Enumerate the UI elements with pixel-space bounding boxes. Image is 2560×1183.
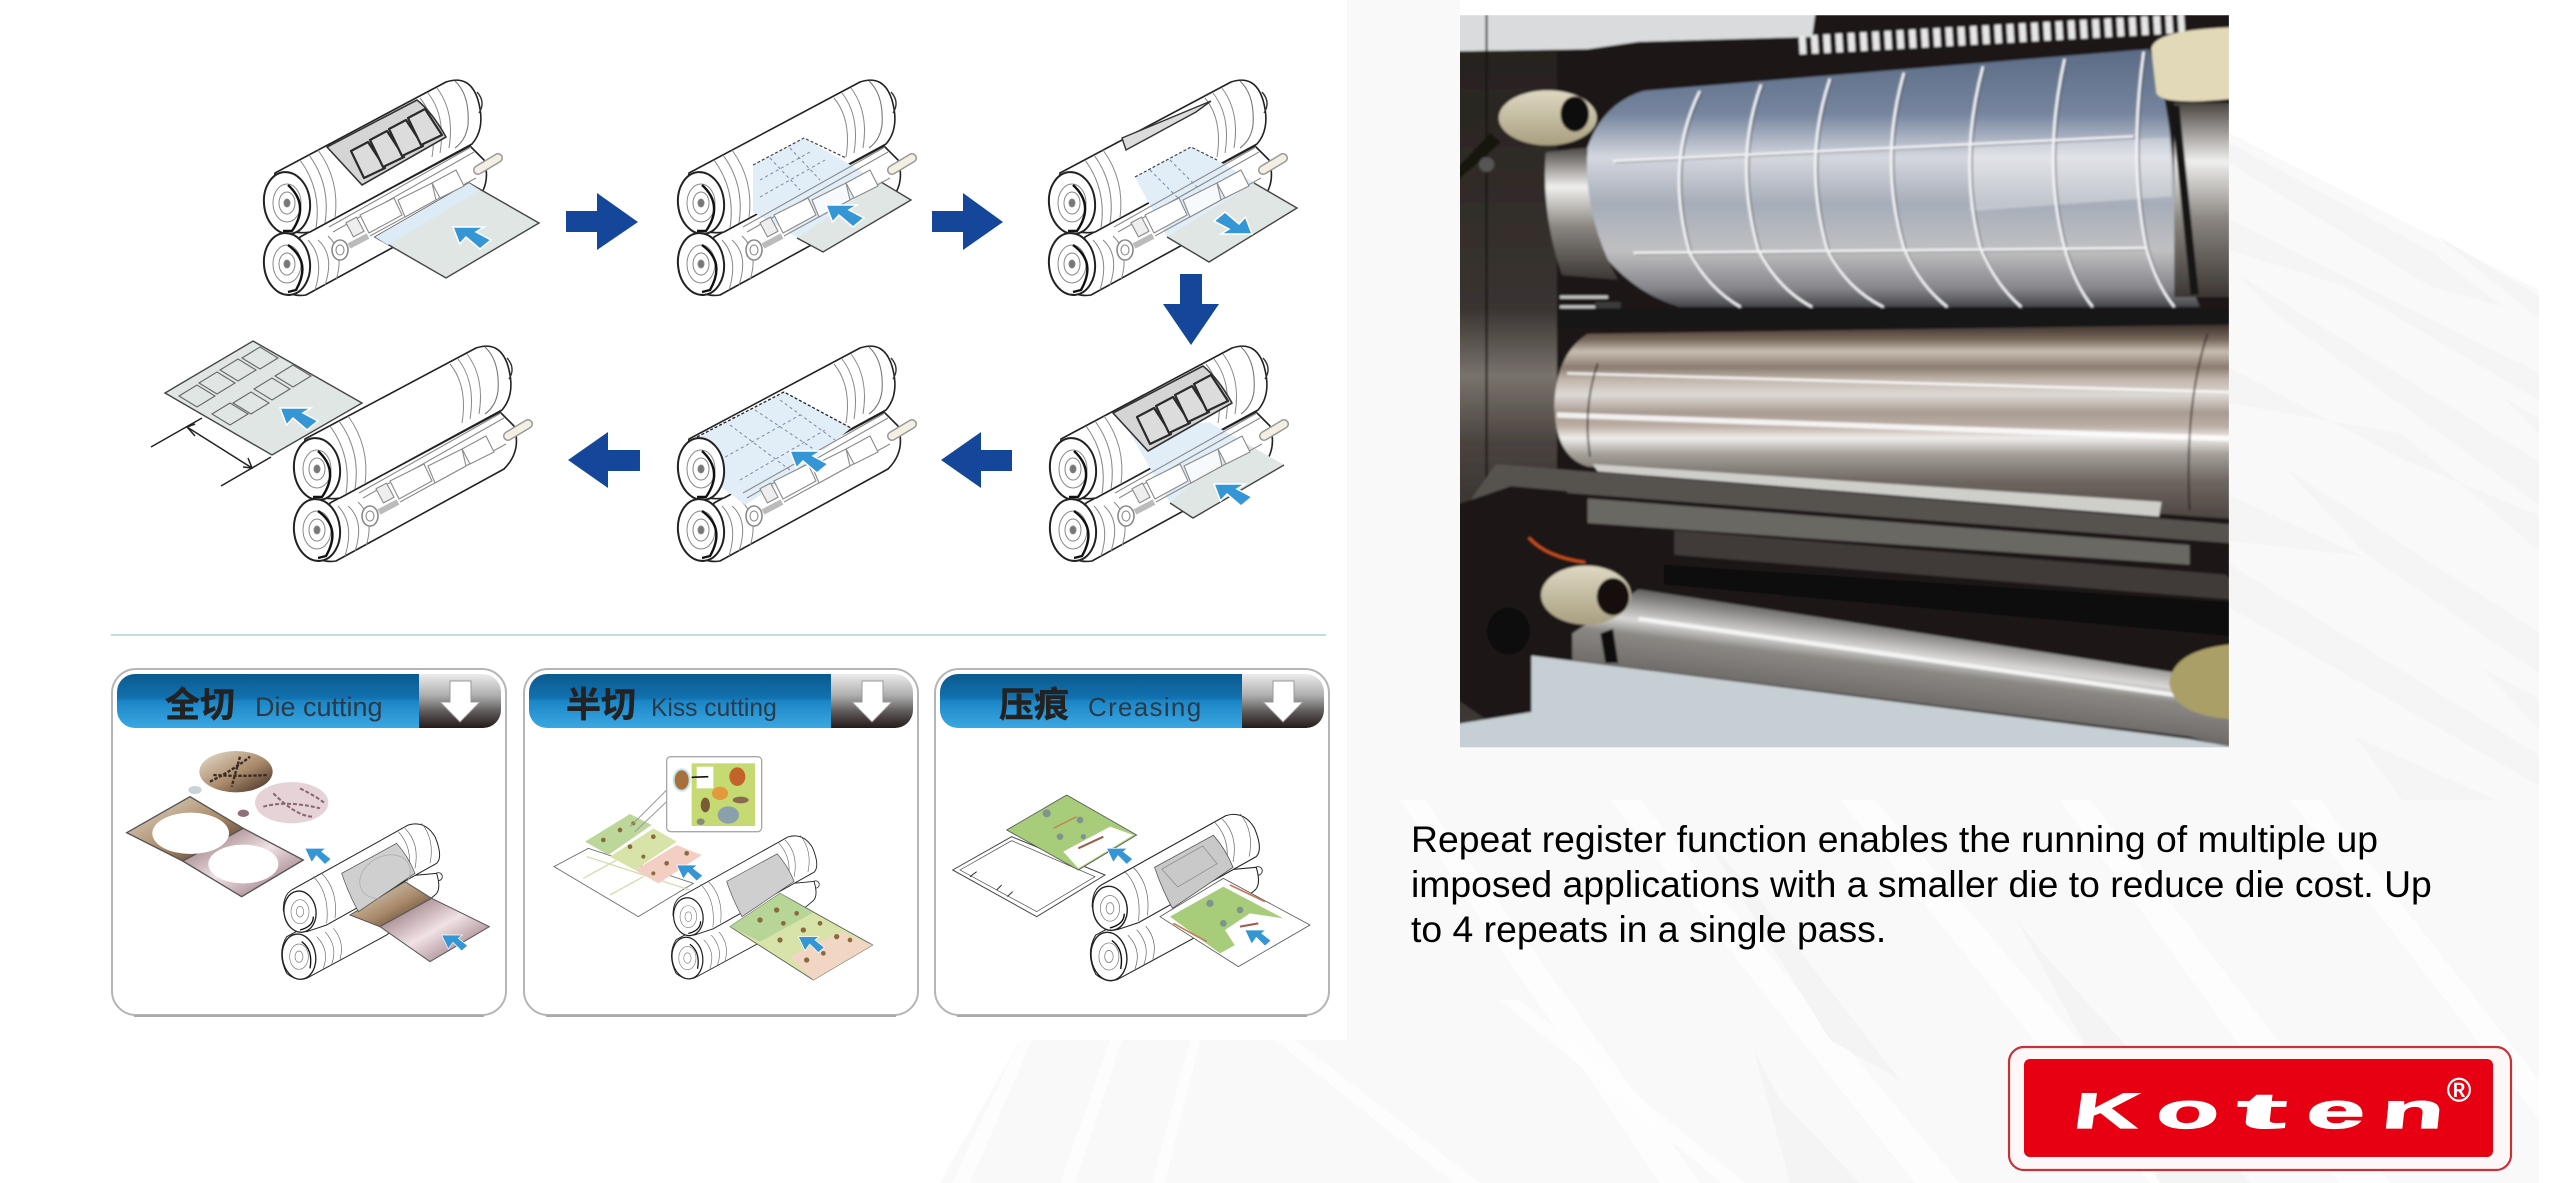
wool wipers: [1499, 90, 1597, 145]
step 5: sheet wrapping cylinder: [675, 346, 912, 563]
step 1: die plate with four windows, sheet feeding: [261, 80, 539, 297]
logo: Koten: t: [2234, 1083, 2290, 1139]
arrow: step 3 to 4: [1163, 274, 1219, 345]
arrow: step 1 to 2: [566, 193, 638, 250]
card: kiss cutting: [524, 669, 918, 1016]
upper right bands: [2229, 143, 2539, 800]
logo: Koten: o: [2154, 1083, 2222, 1139]
vent slots: [1799, 24, 2184, 45]
step 2: sheet under cylinder: [675, 80, 912, 297]
die cutting illustration: [127, 751, 489, 981]
lower roller: [1572, 589, 2256, 756]
kiss cutting illustration: [554, 757, 873, 981]
card heading: creasing: 压痕: [999, 686, 1069, 725]
logo: Koten: e: [2304, 1083, 2368, 1139]
callout: sticker detail: [630, 757, 762, 832]
card heading: creasing: Creasing: [1088, 692, 1202, 722]
step 4: die plate, second sheet feed: [1047, 346, 1284, 563]
card heading: die cutting: 全切: [165, 686, 235, 725]
bottom light floor: [1460, 654, 2229, 748]
hubs: [1545, 147, 1618, 280]
logo: Koten: n: [2379, 1083, 2447, 1139]
logo: Koten: [2009, 1047, 2511, 1170]
card heading: kiss cutting: Kiss cutting: [651, 695, 777, 722]
card heading: creasing: [999, 686, 1202, 725]
step 3: sheet exiting: [1046, 80, 1297, 297]
logo: Koten: ®: [2447, 1071, 2471, 1108]
description text: to 4 repeats in a single pass.: [1411, 908, 1886, 950]
arrow: step 5 to 6: [568, 432, 640, 488]
photo: die cylinder on anvil roller: [1460, 15, 2229, 748]
card heading: die cutting: [165, 686, 383, 725]
output sheet with eight cut labels: [151, 341, 362, 486]
arrow: step 4 to 5: [941, 432, 1012, 488]
card heading: kiss cutting: [566, 686, 777, 725]
anvil roller: [1554, 324, 2256, 521]
description text: imposed applications with a smaller die to reduce die cost. Up: [1411, 863, 2432, 905]
lower dark and blade: [1470, 464, 2256, 545]
arrow: step 2 to 3: [932, 193, 1003, 250]
step 6: plain cylinder: [291, 346, 528, 563]
logo: Koten: K: [2070, 1083, 2144, 1139]
gap and cables: [1560, 297, 1608, 317]
die cylinder: [1587, 49, 2200, 307]
card heading: die cutting: Die cutting: [255, 692, 383, 722]
description text: [1411, 818, 2432, 950]
divider line: [111, 634, 1326, 636]
description text: Repeat register function enables the running of multiple up: [1411, 818, 2378, 860]
card: die cutting: [112, 669, 506, 1016]
card heading: kiss cutting: 半切: [566, 686, 636, 725]
white panel: process diagrams: [0, 0, 1347, 1040]
card: creasing: [935, 669, 1329, 1016]
creasing illustration: [953, 795, 1310, 983]
